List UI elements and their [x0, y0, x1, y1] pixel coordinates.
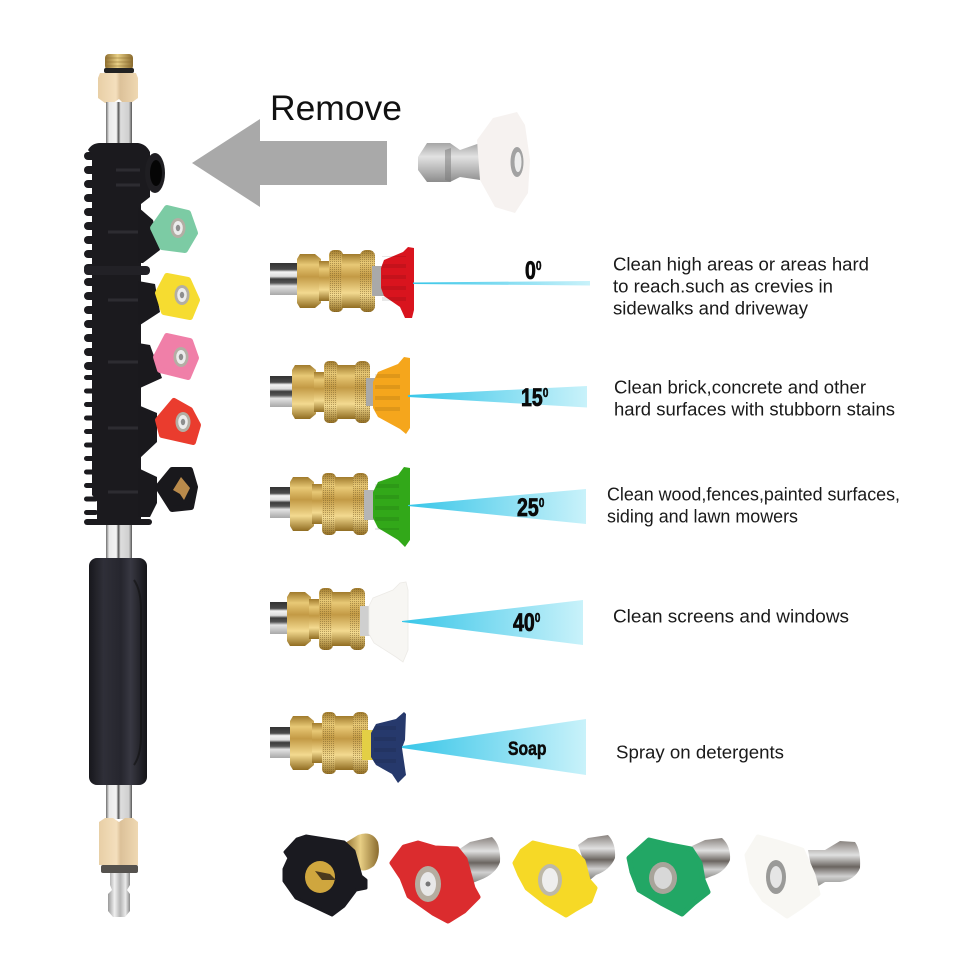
- black soap nozzle: [284, 834, 379, 915]
- brass fitting: [292, 361, 370, 423]
- rod: [270, 263, 302, 295]
- orange cap: [366, 357, 410, 434]
- angle label: 0: [535, 611, 540, 625]
- mint nozzle: [153, 208, 195, 250]
- description: siding and lawn mowers: [607, 506, 798, 526]
- angle label: 0: [543, 386, 548, 400]
- description: Clean brick,concrete and other: [614, 378, 866, 398]
- lower beige hex nut: [99, 818, 138, 865]
- angle label: 15: [521, 384, 543, 412]
- navy cap: [362, 712, 406, 783]
- yellow nozzle: [515, 835, 615, 915]
- yellow nozzle: [158, 276, 197, 317]
- handle grip: [89, 558, 147, 785]
- white cap: [360, 582, 408, 662]
- beige hex nut: [98, 73, 138, 103]
- quick connect plug: [101, 865, 138, 917]
- brass fitting: [297, 250, 375, 312]
- description: [607, 484, 900, 526]
- description: Spray on detergents: [616, 742, 784, 762]
- description: [613, 254, 869, 318]
- rod: [270, 602, 290, 634]
- angle label: 0: [525, 257, 536, 285]
- rod: [270, 487, 296, 518]
- red cap: [372, 247, 414, 318]
- row: 15 degree nozzle: [270, 357, 895, 434]
- angle label: 40: [513, 609, 535, 637]
- angle label: 0: [536, 259, 541, 273]
- spray: [408, 489, 586, 524]
- rod: [270, 376, 296, 407]
- description: Clean wood,fences,painted surfaces,: [607, 484, 900, 504]
- description: [614, 378, 895, 420]
- soap label: Soap: [508, 738, 547, 759]
- spray: [402, 600, 583, 645]
- row: 0 degree nozzle: [270, 247, 869, 318]
- brass fitting: [290, 473, 368, 535]
- description: sidewalks and driveway: [613, 298, 809, 318]
- row: 40 degree nozzle: [270, 582, 849, 662]
- description: Clean screens and windows: [613, 606, 849, 626]
- spray wand assembly: [84, 54, 198, 917]
- brass top connector: [104, 54, 134, 73]
- row: soap nozzle: [270, 712, 784, 783]
- white nozzle: [747, 837, 860, 916]
- heading: Remove: Remove: [270, 88, 402, 128]
- nozzle set: [284, 834, 860, 921]
- row: 25 degree nozzle: [270, 467, 900, 547]
- brass fitting: [287, 588, 365, 650]
- description: hard surfaces with stubborn stains: [614, 400, 895, 420]
- spray: [413, 281, 590, 286]
- red nozzle: [392, 837, 500, 921]
- green nozzle: [629, 838, 730, 914]
- angle label: 25: [517, 494, 539, 522]
- spray: [402, 719, 586, 775]
- removed white nozzle: [418, 112, 530, 213]
- angle label: 0: [539, 496, 544, 510]
- description: to reach.such as crevies in: [613, 276, 833, 296]
- lower tube sections: [106, 520, 132, 819]
- pink nozzle: [156, 336, 196, 377]
- red nozzle: [158, 401, 198, 442]
- upper steel tube: [106, 102, 132, 145]
- green cap: [364, 467, 410, 547]
- black nozzle holder: [84, 143, 165, 525]
- black soap nozzle: [158, 470, 195, 509]
- arrow: [192, 119, 387, 207]
- description: Clean high areas or areas hard: [613, 254, 869, 274]
- rod: [270, 727, 294, 758]
- brass fitting: [290, 712, 368, 774]
- spray: [408, 386, 587, 408]
